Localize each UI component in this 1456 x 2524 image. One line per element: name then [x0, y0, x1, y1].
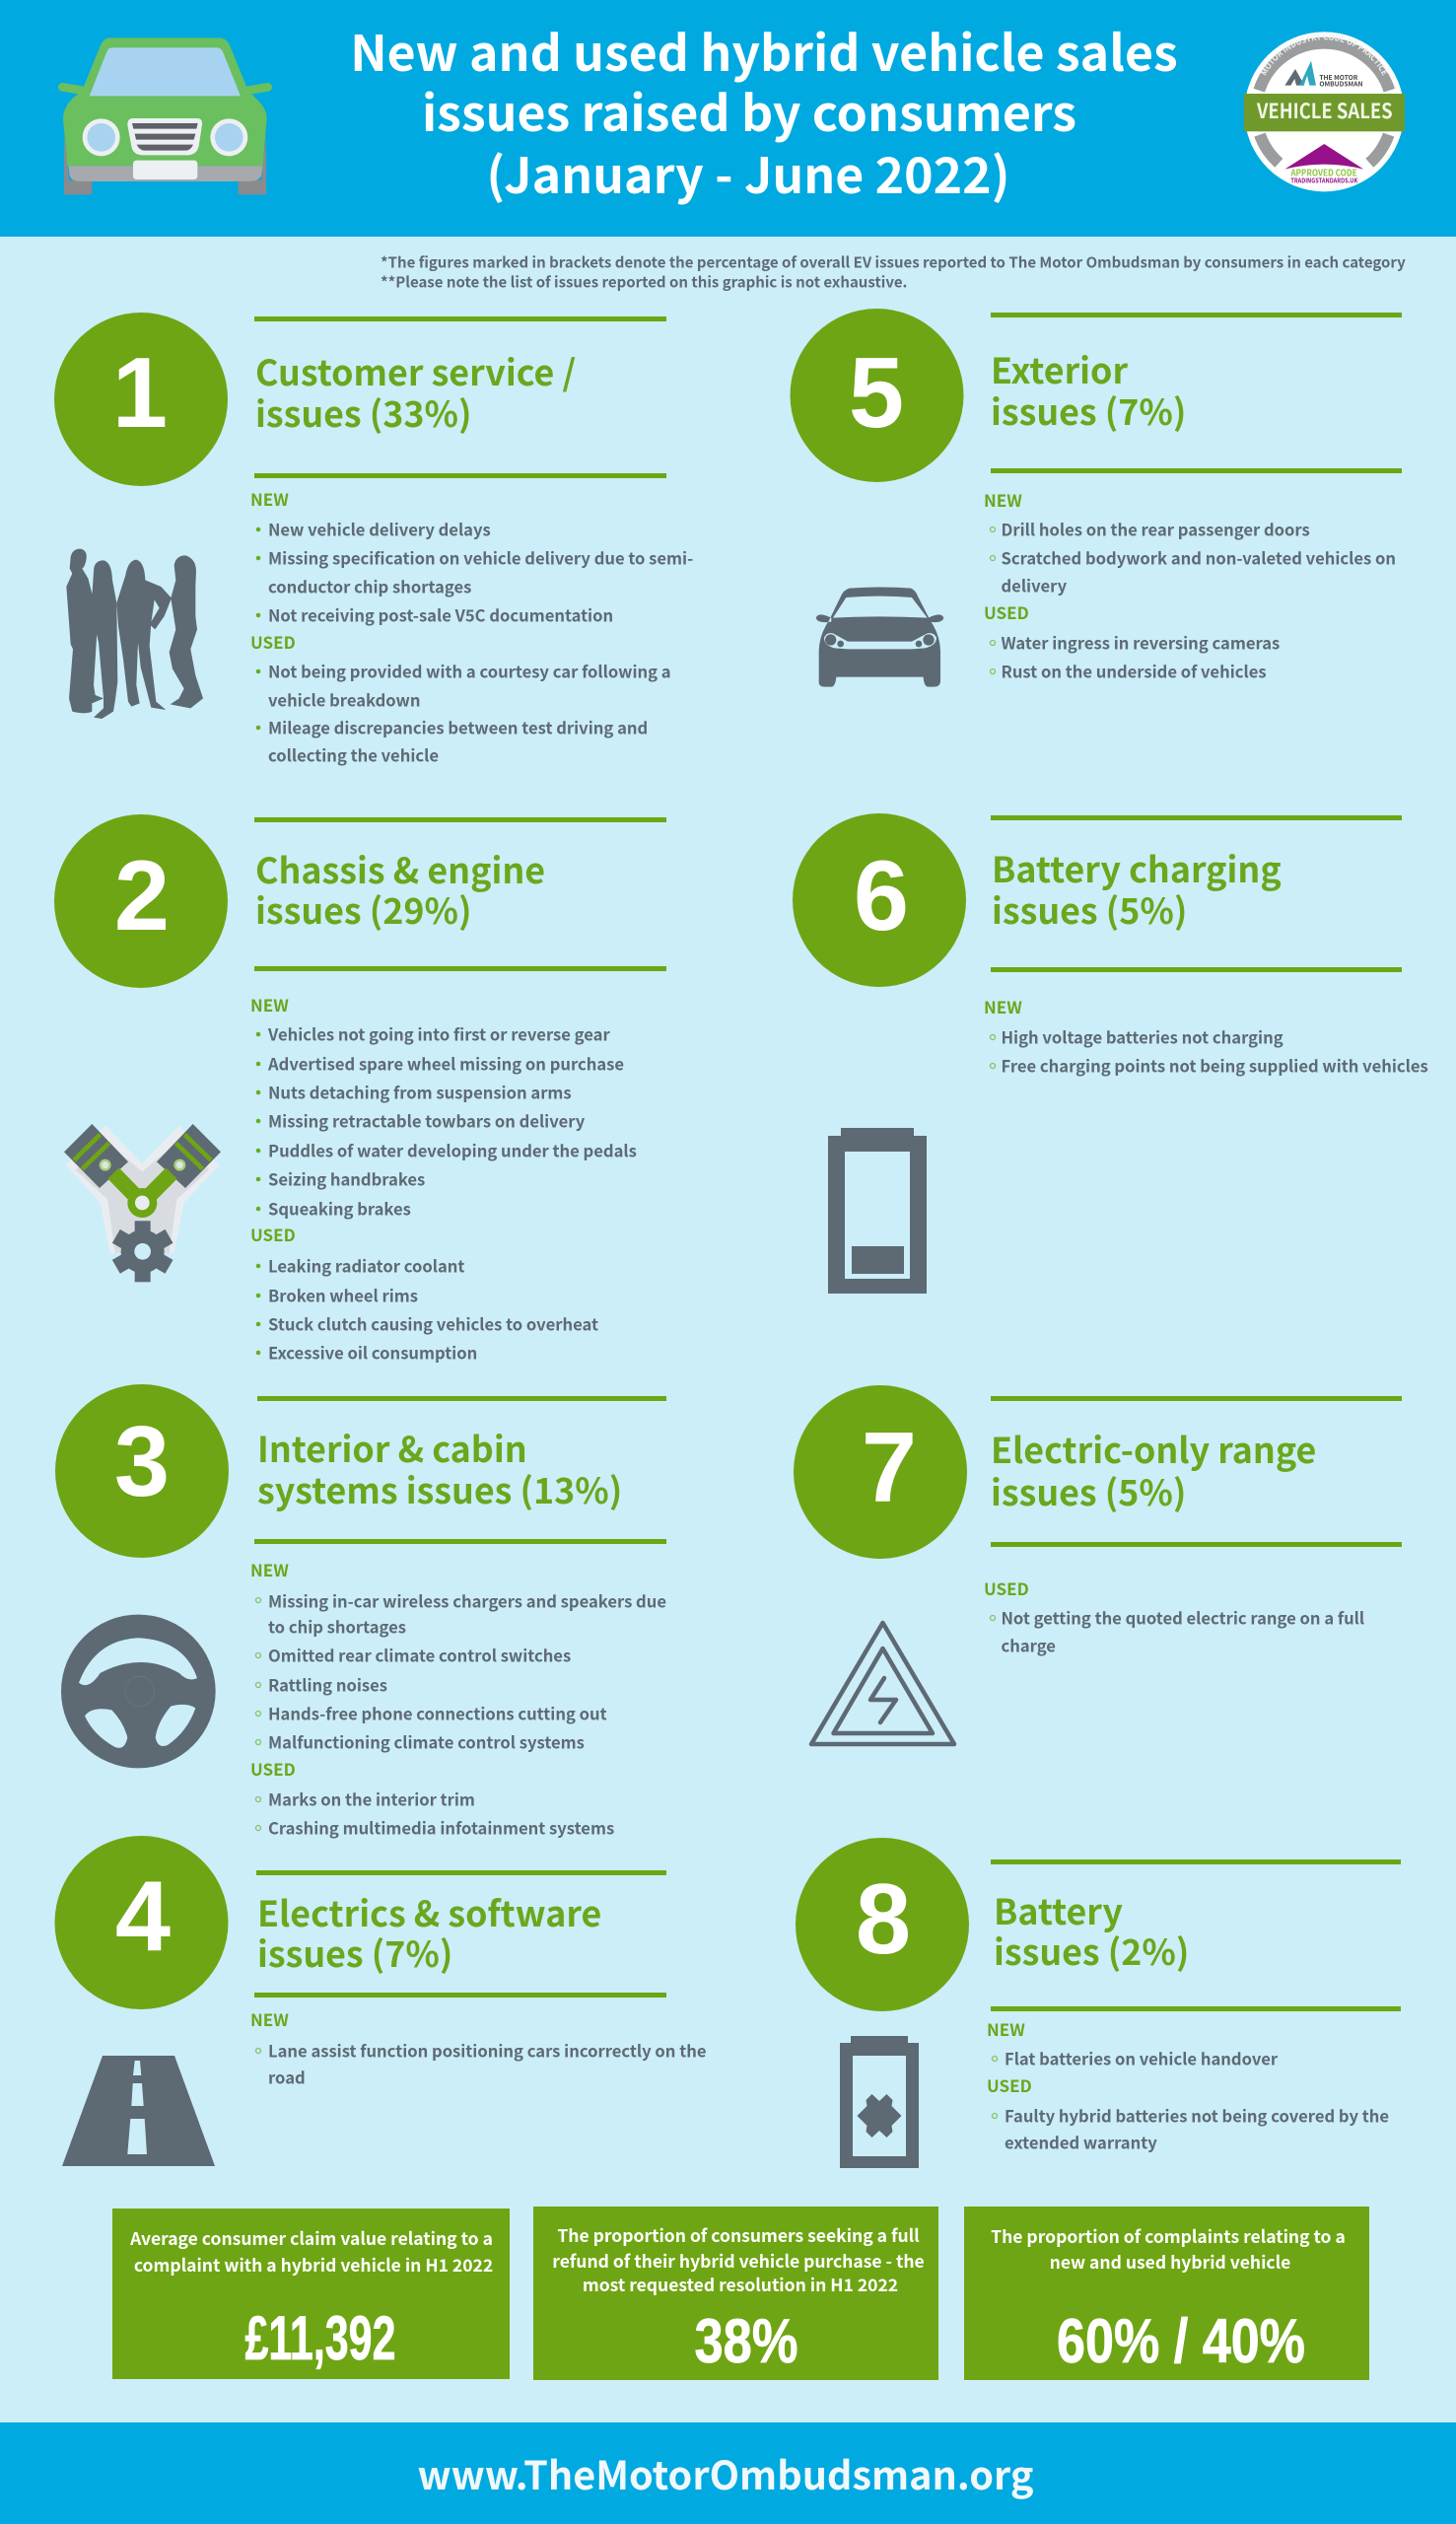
- header band: [0, 0, 1456, 237]
- panel: 2 chassis and engine: Missing retractable towbars on delivery: [268, 1109, 586, 1133]
- panel: 2 chassis and engine: Puddles of water developing under the pedals: [268, 1139, 637, 1162]
- panel: 5 exterior: 5: [849, 338, 904, 449]
- panel: 1 customer service: Customer service /: [255, 345, 576, 396]
- stat box: average claim value: £11,392: [244, 2304, 396, 2373]
- stat box: full refund proportion: refund of their hybrid vehicle purchase - the: [552, 2249, 925, 2274]
- panel: 6 battery charging: issues (5%): [992, 883, 1187, 935]
- panel: 1 customer service: 1: [112, 338, 168, 449]
- panel: 8 battery: USED: [987, 2072, 1032, 2097]
- panel: 4 electrics and software: NEW: [250, 2006, 289, 2031]
- stat box: new and used split: [964, 2207, 1369, 2380]
- panel: 1 customer service: Missing specification on vehicle delivery due to semi-: [268, 546, 693, 570]
- icon: steering wheel: [61, 1615, 216, 1768]
- panel: 2 chassis and engine: Chassis & engine: [255, 843, 545, 894]
- badge: vehicle sales approved code: TRADINGSTANDARDS.UK: [1290, 175, 1358, 185]
- badge: vehicle sales approved code: OMBUDSMAN: [1319, 78, 1362, 88]
- panel: 1 customer service: Not being provided with a courtesy car following a: [268, 660, 671, 683]
- panel: 2 chassis and engine: issues (29%): [255, 883, 472, 935]
- panel: 2 chassis and engine: Leaking radiator coolant: [268, 1254, 464, 1278]
- stat box: full refund proportion: 38%: [694, 2307, 798, 2376]
- panel: 5 exterior: Water ingress in reversing cameras: [1002, 631, 1280, 655]
- panel: 2 chassis and engine: USED: [250, 1222, 296, 1246]
- panel: 2 chassis and engine: Seizing handbrakes: [268, 1167, 425, 1191]
- panel: 7 electric-only range: issues (5%): [991, 1465, 1186, 1516]
- panel: 2 chassis and engine: Vehicles not going into first or reverse gear: [267, 1022, 610, 1046]
- panel: 3 interior and cabin systems: Interior & cabin: [257, 1422, 527, 1473]
- panel: 1 customer service: New vehicle delivery delays: [268, 518, 491, 541]
- panel: 4 electrics and software: Lane assist function positioning cars incorrectly on the: [268, 2039, 706, 2063]
- icon: car front: [816, 587, 943, 687]
- icon: faulty battery: [840, 2036, 919, 2168]
- panel: 4 electrics and software: Electrics & software: [257, 1886, 601, 1937]
- panel: 3 interior and cabin systems: Rattling noises: [268, 1673, 387, 1697]
- panel: 5 exterior: NEW: [984, 487, 1022, 512]
- icon: low battery: [828, 1128, 927, 1294]
- panel: 2 chassis and engine: Advertised spare wheel missing on purchase: [267, 1052, 624, 1076]
- panel: 6 battery charging: Free charging points not being supplied with vehicles: [1002, 1054, 1428, 1078]
- panel: 2 chassis and engine: Nuts detaching from suspension arms: [268, 1081, 572, 1104]
- icon: green car: [62, 37, 268, 194]
- panel: 1 customer service: issues (33%): [255, 386, 472, 438]
- panel: 3 interior and cabin systems: Crashing multimedia infotainment systems: [268, 1816, 614, 1840]
- panel: 3 interior and cabin systems: [55, 1384, 666, 1840]
- footer url: www.TheMotorOmbudsman.org: [418, 2445, 1033, 2501]
- title: New and used hybrid vehicle sales: [350, 15, 1178, 86]
- panel: 1 customer service: Mileage discrepancies between test driving and: [268, 716, 648, 739]
- panel: 3 interior and cabin systems: Omitted rear climate control switches: [268, 1644, 571, 1667]
- panel: 2 chassis and engine: Broken wheel rims: [268, 1284, 418, 1307]
- panel: 3 interior and cabin systems: Marks on the interior trim: [268, 1788, 475, 1811]
- panel: 6 battery charging: [793, 813, 1428, 1294]
- panel: 5 exterior: USED: [984, 599, 1029, 624]
- panel: 8 battery: [796, 1838, 1401, 2168]
- footer band: [0, 2422, 1456, 2524]
- footnotes: **Please note the list of issues reported on this graphic is not exhaustive.: [381, 272, 907, 292]
- badge: vehicle sales approved code: MOTOR INDUSTRY CODE OF PRACTICE: [1261, 34, 1388, 76]
- stat box: new and used split: The proportion of complaints relating to a: [991, 2224, 1346, 2249]
- panel: 8 battery: Flat batteries on vehicle handover: [1005, 2047, 1279, 2070]
- panel: 1 customer service: conductor chip shortages: [268, 575, 471, 598]
- panel: 7 electric-only range: [794, 1385, 1402, 1744]
- panel: 6 battery charging: Battery charging: [992, 842, 1282, 893]
- stat box: full refund proportion: most requested resolution in H1 2022: [583, 2273, 898, 2297]
- panel: 8 battery: Faulty hybrid batteries not being covered by the: [1005, 2104, 1389, 2128]
- panel: 5 exterior: Drill holes on the rear passenger doors: [1002, 518, 1310, 541]
- panel: 3 interior and cabin systems: Malfunctioning climate control systems: [268, 1730, 585, 1754]
- panel: 3 interior and cabin systems: to chip shortages: [268, 1615, 406, 1639]
- panel: 8 battery: NEW: [987, 2016, 1025, 2041]
- stat box: new and used split: new and used hybrid vehicle: [1050, 2250, 1290, 2275]
- footnotes: [381, 252, 1406, 292]
- icon: high voltage warning triangle: [811, 1623, 954, 1744]
- panel: 8 battery: Battery: [994, 1884, 1123, 1935]
- panel: 1 customer service: USED: [250, 629, 296, 654]
- panel: 3 interior and cabin systems: systems issues (13%): [257, 1463, 622, 1514]
- footnotes: *The figures marked in brackets denote the percentage of overall EV issues reported to The Motor Ombudsman by consumers in each category: [381, 252, 1406, 272]
- panel: 2 chassis and engine: [54, 814, 666, 1365]
- stat box: average claim value: complaint with a hybrid vehicle in H1 2022: [134, 2253, 493, 2278]
- panel: 4 electrics and software: [55, 1836, 706, 2166]
- panel: 7 electric-only range: Electric-only range: [991, 1423, 1316, 1474]
- panel: 2 chassis and engine: 2: [114, 841, 170, 951]
- stat box: full refund proportion: The proportion of consumers seeking a full: [557, 2223, 920, 2248]
- panel: 5 exterior: issues (7%): [991, 385, 1186, 436]
- panel: 7 electric-only range: charge: [1002, 1634, 1056, 1657]
- panel: 5 exterior: [791, 309, 1402, 687]
- panel: 8 battery: issues (2%): [994, 1925, 1189, 1976]
- panel: 4 electrics and software: issues (7%): [257, 1927, 452, 1978]
- panel: 3 interior and cabin systems: Missing in-car wireless chargers and speakers due: [268, 1589, 666, 1613]
- icon: engine pistons and gear: [64, 1124, 221, 1282]
- stat box: new and used split: 60% / 40%: [1057, 2307, 1305, 2376]
- panel: 3 interior and cabin systems: USED: [250, 1756, 296, 1781]
- panel: 6 battery charging: 6: [854, 841, 909, 951]
- stat box: average claim value: Average consumer claim value relating to a: [129, 2226, 493, 2251]
- badge: vehicle sales approved code: VEHICLE SALES: [1256, 95, 1393, 124]
- panel: 7 electric-only range: 7: [862, 1413, 917, 1523]
- panel: 8 battery: extended warranty: [1005, 2131, 1157, 2154]
- panel: 3 interior and cabin systems: 3: [114, 1407, 170, 1517]
- panel: 3 interior and cabin systems: NEW: [250, 1557, 289, 1581]
- panel: 1 customer service: vehicle breakdown: [268, 688, 420, 712]
- stat box: full refund proportion: [533, 2207, 938, 2380]
- panel: 6 battery charging: High voltage batteries not charging: [1002, 1025, 1283, 1049]
- icon: group of people: [66, 549, 203, 719]
- panel: 5 exterior: delivery: [1002, 574, 1068, 597]
- panel: 1 customer service: Not receiving post-sale V5C documentation: [268, 603, 613, 627]
- badge: vehicle sales approved code: THE MOTOR: [1319, 72, 1358, 82]
- panel: 2 chassis and engine: Squeaking brakes: [268, 1197, 411, 1221]
- panel: 4 electrics and software: 4: [115, 1861, 171, 1972]
- panel: 2 chassis and engine: Excessive oil consumption: [268, 1341, 477, 1365]
- panel: 1 customer service: [54, 313, 693, 767]
- panel: 3 interior and cabin systems: Hands-free phone connections cutting out: [268, 1702, 607, 1725]
- panel: 2 chassis and engine: Stuck clutch causing vehicles to overheat: [268, 1312, 598, 1336]
- stat box: average claim value: [112, 2208, 510, 2379]
- panel: 5 exterior: Exterior: [991, 343, 1128, 394]
- panel: 7 electric-only range: Not getting the quoted electric range on a full: [1002, 1606, 1364, 1630]
- panel: 1 customer service: collecting the vehicle: [268, 743, 439, 767]
- title: [350, 15, 1178, 208]
- panel: 1 customer service: NEW: [250, 486, 289, 511]
- badge: vehicle sales approved code: [1244, 32, 1405, 191]
- panel: 8 battery: 8: [856, 1864, 911, 1975]
- badge: vehicle sales approved code: APPROVED CODE: [1289, 167, 1357, 179]
- panel: 4 electrics and software: road: [268, 2066, 306, 2089]
- icon: road: [62, 2056, 215, 2166]
- panel: 5 exterior: Rust on the underside of vehicles: [1002, 660, 1267, 683]
- title: issues raised by consumers: [422, 75, 1076, 146]
- panel: 2 chassis and engine: NEW: [250, 992, 289, 1017]
- panel: 5 exterior: Scratched bodywork and non-valeted vehicles on: [1002, 546, 1396, 570]
- panel: 6 battery charging: NEW: [984, 994, 1022, 1018]
- title: (January - June 2022): [486, 137, 1010, 208]
- panel: 7 electric-only range: USED: [984, 1576, 1029, 1600]
